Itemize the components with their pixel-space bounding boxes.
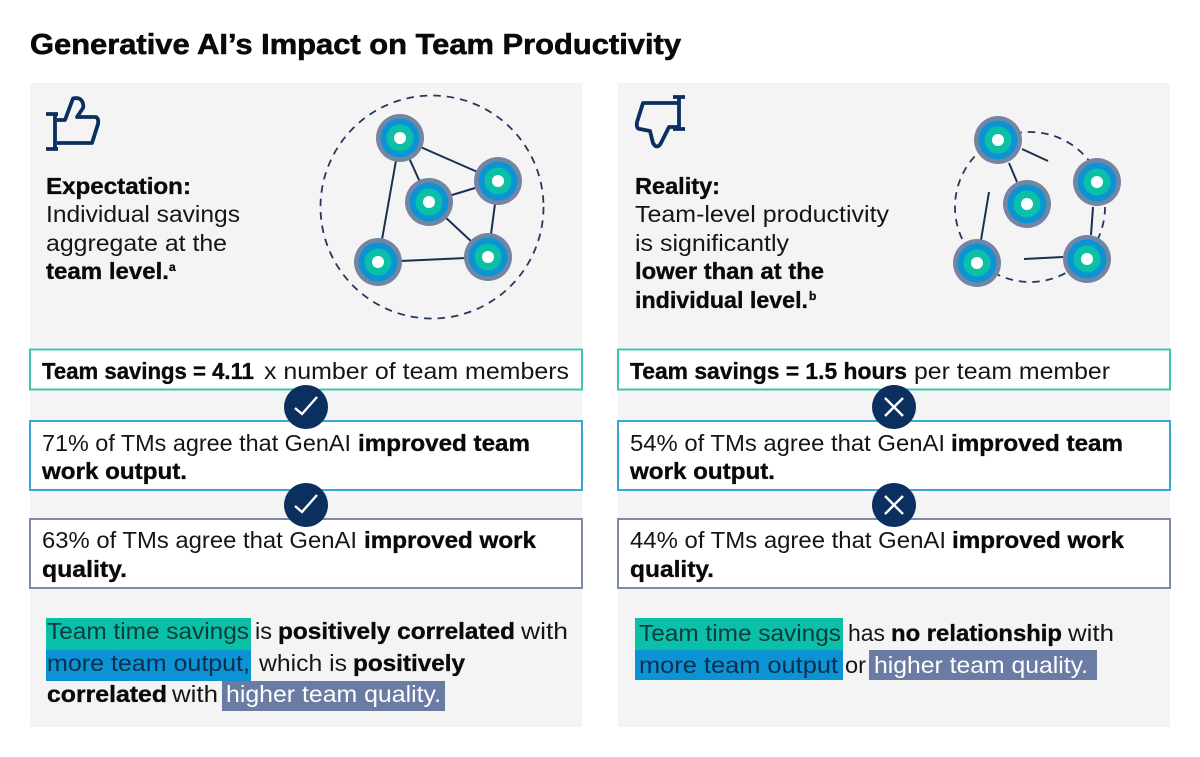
conclusion text with highlights: higher team quality.	[874, 652, 1088, 678]
panel: reality	[618, 83, 1170, 727]
box: team savings formula: x number of team members	[264, 358, 569, 384]
icon: cross badge 2	[872, 483, 916, 527]
box: work quality	[618, 519, 1170, 588]
title: Generative AI’s Impact on Team Productivity	[30, 29, 681, 61]
box: team work output: 54% of TMs agree that GenAI	[630, 430, 945, 456]
expectation text block: a	[169, 260, 176, 274]
expectation text block: Individual savings	[46, 201, 240, 227]
conclusion text with highlights	[635, 618, 1114, 680]
reality text block: individual level.	[635, 287, 808, 313]
box: team savings formula	[618, 350, 1170, 390]
reality text block: Reality:	[635, 173, 720, 199]
reality text block: b	[809, 289, 816, 303]
box: team savings formula: Team savings = 1.5 hours	[630, 358, 907, 384]
box: team savings formula: per team member	[914, 358, 1110, 384]
conclusion text with highlights: no relationship	[891, 620, 1062, 646]
icon: check badge 2	[284, 483, 328, 527]
conclusion text with highlights: correlated	[47, 681, 167, 707]
box: work quality: quality.	[630, 556, 714, 582]
conclusion text with highlights: higher team quality.	[226, 681, 441, 707]
conclusion text with highlights: has	[848, 620, 885, 646]
icon: thumbs up	[46, 98, 98, 149]
panel: expectation	[30, 83, 582, 727]
conclusion text with highlights: more team output	[639, 652, 839, 678]
conclusion text with highlights: Team time savings	[47, 618, 249, 644]
box: work quality: quality.	[42, 556, 127, 582]
icon: cross badge 1	[872, 385, 916, 429]
box: work quality: improved work	[952, 527, 1124, 553]
conclusion text with highlights: positively correlated	[278, 618, 515, 644]
box: team work output: improved team	[358, 430, 530, 456]
icon: check badge 1	[284, 385, 328, 429]
conclusion text with highlights: with	[171, 681, 218, 707]
expectation text block: Expectation:	[46, 173, 191, 199]
conclusion text with highlights: more team output,	[47, 650, 250, 676]
box: team work output	[618, 421, 1170, 490]
box: work quality: 44% of TMs agree that GenAI	[630, 527, 946, 553]
conclusion text with highlights: with	[1067, 620, 1114, 646]
conclusion text with highlights: is	[255, 618, 272, 644]
reality text block: Team-level productivity	[635, 201, 890, 227]
box: work quality	[30, 519, 582, 588]
conclusion text with highlights: or	[845, 652, 866, 678]
network diagram: disconnected team	[953, 116, 1121, 287]
panel background	[30, 83, 582, 727]
conclusion text with highlights: positively	[353, 650, 465, 676]
box: team savings formula: Team savings = 4.11	[42, 358, 254, 384]
expectation text block: team level.	[46, 258, 169, 284]
network diagram: connected team	[320, 96, 544, 318]
reality text block: lower than at the	[635, 258, 824, 284]
icon: thumbs down	[637, 97, 685, 146]
box: team work output: work output.	[41, 458, 187, 484]
box: work quality: improved work	[364, 527, 536, 553]
reality text block: is significantly	[635, 230, 790, 256]
reality text block	[635, 173, 890, 313]
conclusion text with highlights: which is	[258, 650, 347, 676]
panel background	[618, 83, 1170, 727]
box: team work output: work output.	[629, 458, 775, 484]
box: team savings formula	[30, 350, 582, 390]
conclusion text with highlights: Team time savings	[639, 620, 841, 646]
conclusion text with highlights: with	[520, 618, 568, 644]
box: team work output: improved team	[951, 430, 1123, 456]
conclusion text with highlights	[46, 618, 568, 711]
expectation text block	[46, 173, 240, 284]
box: work quality: 63% of TMs agree that GenAI	[42, 527, 357, 553]
box: team work output: 71% of TMs agree that GenAI	[42, 430, 351, 456]
expectation text block: aggregate at the	[46, 230, 227, 256]
box: team work output	[30, 421, 582, 490]
